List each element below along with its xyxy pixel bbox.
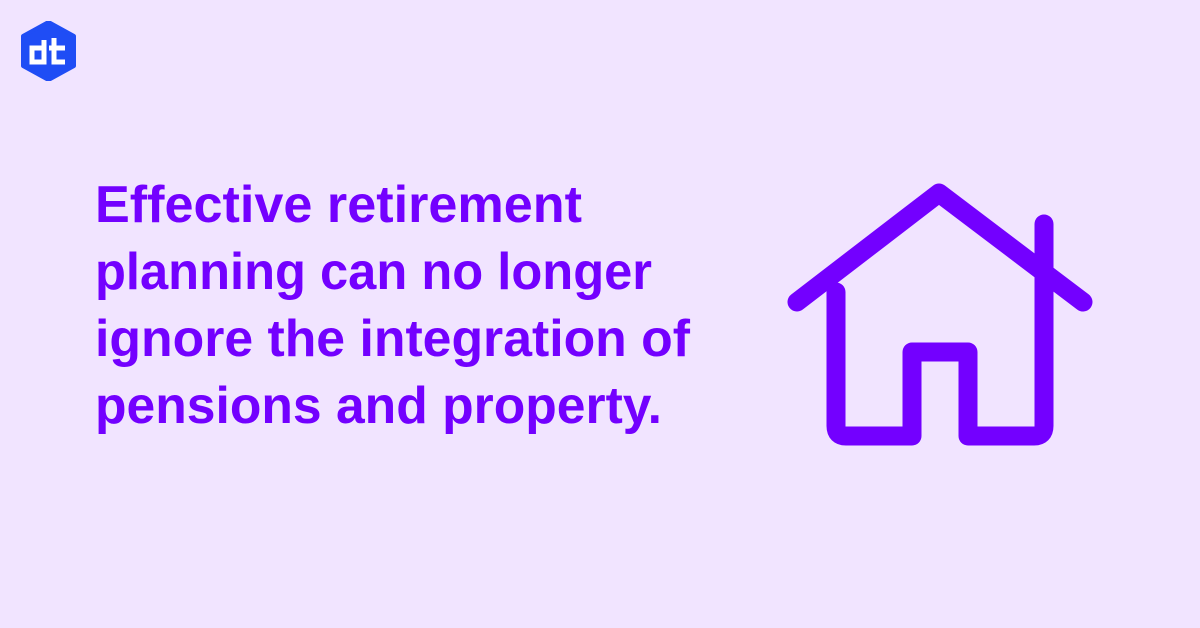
headline text: pensions and property. — [95, 377, 662, 435]
headline text — [95, 176, 691, 435]
headline text: ignore the integration of — [95, 310, 691, 368]
logo — [21, 21, 76, 81]
headline text: planning can no longer — [95, 243, 652, 301]
headline text: Effective retirement — [95, 176, 582, 234]
icon: house — [788, 184, 1092, 446]
